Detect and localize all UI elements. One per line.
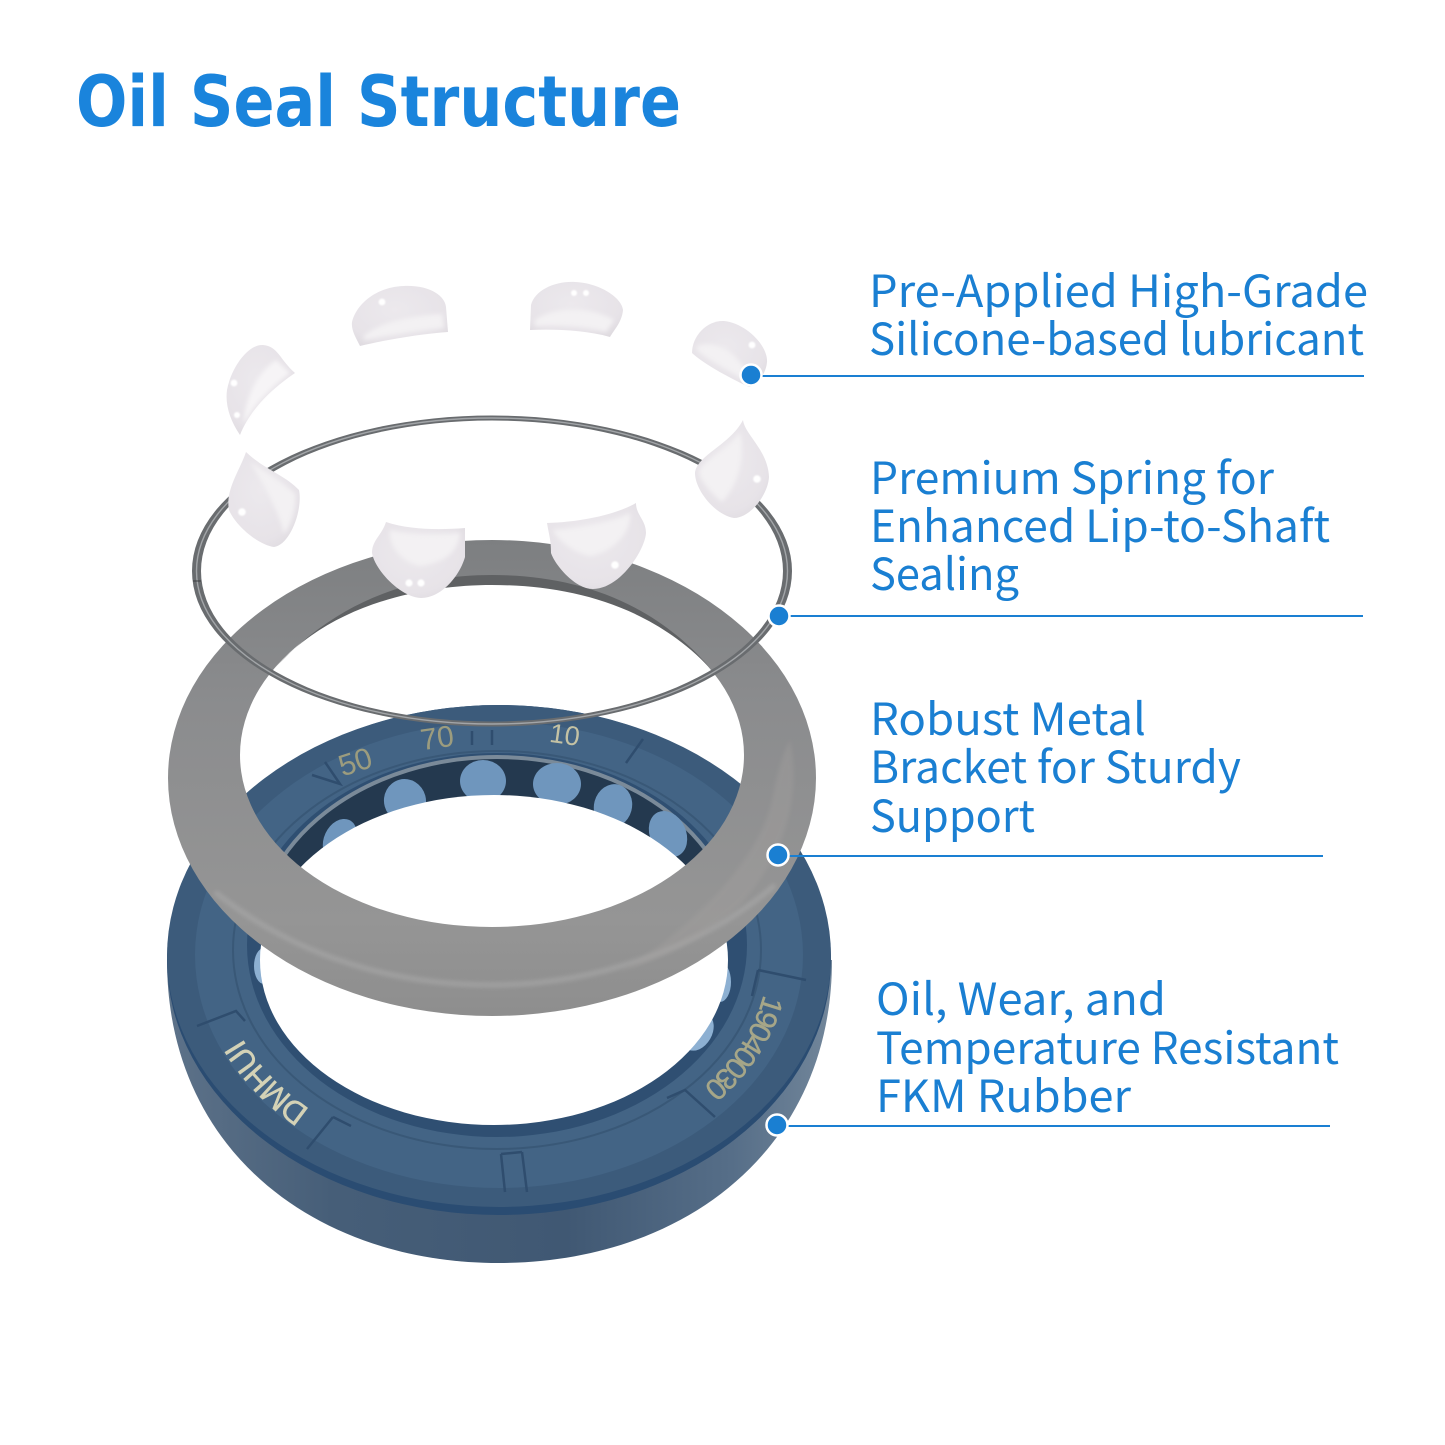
seal centre opening (260, 795, 728, 1125)
engraved markings: 50 (334, 742, 376, 783)
label: bracket: Robust Metal (870, 684, 1146, 748)
leader: rubber (766, 1114, 1330, 1136)
label: rubber: FKM Rubber (876, 1061, 1132, 1125)
metal bracket ring (168, 540, 816, 1016)
bearing cavity (284, 755, 706, 867)
rubber dark lip edge (167, 705, 831, 1215)
lubricant blobs (227, 282, 769, 598)
leader: spring (768, 606, 1363, 626)
engraved markings: 19040030 (706, 996, 782, 1099)
label: lubricant: Pre-Applied High-Grade (869, 256, 1368, 320)
blob 3 (692, 321, 767, 387)
rubber outer side wall (167, 960, 832, 1263)
engraved markings: DMHUI (224, 1040, 308, 1126)
blob 1 (352, 286, 448, 346)
label: rubber: Oil, Wear, and (876, 964, 1166, 1028)
label: spring (870, 443, 1330, 603)
rubber inner lip (247, 753, 747, 1137)
label: spring: Premium Spring for (870, 443, 1275, 507)
engraved markings: 10 (548, 718, 582, 752)
title: Oil Seal Structure (76, 61, 681, 143)
face notches (197, 730, 806, 1192)
engraved markings: 70 (418, 720, 456, 757)
bracket lighter right side (620, 740, 793, 972)
label: bracket: Bracket for Sturdy (870, 732, 1241, 796)
bearing balls (254, 760, 731, 1056)
label: spring: Sealing (870, 539, 1019, 603)
blob 7 (372, 522, 465, 598)
blob 4 (227, 345, 295, 435)
label: rubber (876, 964, 1339, 1125)
bracket lower bevel (215, 885, 775, 985)
rubber front face rim (167, 705, 831, 1207)
label: bracket (870, 684, 1241, 845)
label: lubricant (869, 256, 1368, 368)
rubber front face (195, 722, 803, 1188)
rubber seal (167, 705, 832, 1263)
label: lubricant: Silicone-based lubricant (869, 304, 1364, 368)
label: bracket: Support (870, 781, 1035, 845)
spring (192, 416, 792, 726)
blob 6 (695, 420, 769, 518)
bracket inner wall (275, 575, 710, 668)
blob 5 (228, 452, 300, 547)
engraved markings (211, 678, 808, 1126)
leader: bracket (768, 844, 1323, 866)
label: spring: Enhanced Lip-to-Shaft (870, 491, 1330, 555)
label: rubber: Temperature Resistant (876, 1013, 1339, 1077)
leader: lubricant (740, 364, 1364, 386)
blob 2 (530, 282, 623, 337)
blob 8 (547, 503, 646, 589)
